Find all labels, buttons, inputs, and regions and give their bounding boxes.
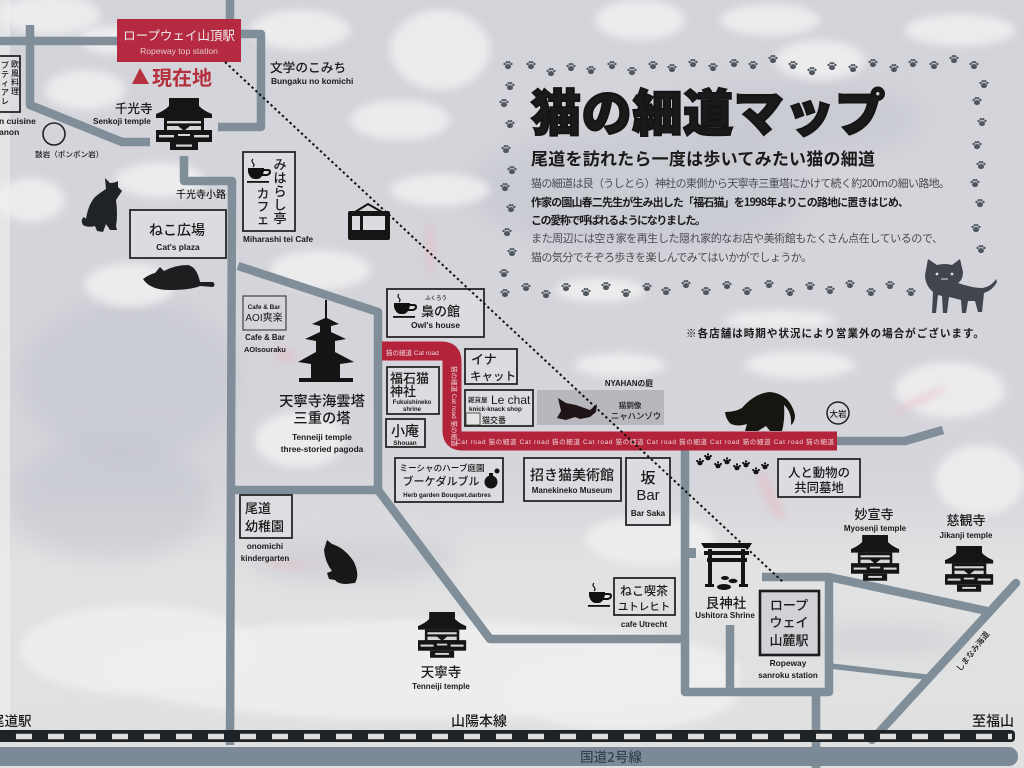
- left cut-off restaurant box: レ: [1, 96, 9, 107]
- Onomichi kindergarten: onomichi: [247, 542, 283, 551]
- Fukuishineko shrine: 神社: [390, 381, 416, 400]
- AOI Cafe and Bar: AOIsouraku: [244, 345, 286, 354]
- Owl's house: [387, 289, 484, 337]
- Tenneiji Kaiunto label: 天寧寺海雲塔: [279, 390, 366, 411]
- description text block: 猫の気分でそぞろ歩きを楽しんでみてはいかがでしょうか。: [531, 249, 812, 265]
- national route 2 band: [0, 746, 1018, 766]
- Bar Saka: Bar Saka: [631, 509, 666, 518]
- label: Bungaku no komichi: Bungaku no komichi: [271, 76, 353, 86]
- Herb garden Bouquet: Herb garden Bouquet.darbres: [403, 492, 491, 499]
- cat road: red path: 猫の細道 Cat road 猫の細道: [450, 366, 459, 447]
- Fukuishineko shrine: shrine: [403, 407, 422, 413]
- rail labels: [0, 710, 1014, 731]
- ropeway dotted line: [225, 62, 783, 582]
- Nyahan garden: NYAHANの庭: [605, 378, 653, 388]
- Owl's house: ふくろう: [425, 294, 447, 302]
- AOI Cafe and Bar: AOI爽楽: [245, 311, 283, 324]
- current location marker: 現在地: [152, 62, 212, 91]
- icon: big black cat: [725, 392, 795, 431]
- Jikanji temple: [940, 510, 993, 592]
- Ropeway sanroku station: ロープ: [770, 595, 808, 614]
- icon: grey cartoon cat: [925, 259, 997, 313]
- left cut-off restaurant box: テ: [1, 69, 9, 80]
- Le chat knick-knack shop: Le chat: [491, 393, 531, 407]
- black paw trail: [696, 453, 769, 474]
- Jikanji temple: Jikanji temple: [940, 531, 993, 540]
- Bar Saka: 坂: [640, 467, 656, 488]
- Ropeway sanroku station: sanroku station: [758, 671, 818, 680]
- ropeway top station label: Ropeway top station: [140, 46, 218, 56]
- Ina cat: [465, 349, 517, 384]
- Tenneiji Kaiunto label: three-storied pagoda: [281, 444, 364, 454]
- icon: sitting cat: [82, 178, 122, 232]
- Jikanji temple: 慈観寺: [946, 510, 986, 529]
- Bonbon rock: [35, 123, 103, 160]
- Oiwa rock: [827, 402, 849, 424]
- Manekineko Museum: Manekineko Museum: [532, 486, 612, 495]
- left cut-off restaurant box: 風: [11, 68, 19, 79]
- Le chat knick-knack shop: knick-knack shop: [469, 406, 522, 413]
- Ina cat: キャット: [470, 368, 516, 384]
- icon: cable car: [348, 204, 390, 240]
- cafe Utrecht: [588, 578, 675, 629]
- left cut-off restaurant box: ブ: [1, 60, 9, 71]
- left cut-off restaurant box: 理: [11, 86, 19, 97]
- Senkoji temple: [93, 98, 212, 150]
- Oiwa rock: 大岩: [829, 408, 847, 420]
- Miharashi-tei cafe: し: [273, 194, 287, 214]
- Miharashi-tei cafe: み: [273, 154, 287, 173]
- Herb garden Bouquet: ミーシャのハーブ庭園: [399, 462, 485, 474]
- railway line: [0, 730, 1015, 742]
- Ina cat: イナ: [471, 349, 497, 368]
- Tenneiji Kaiunto label: Tenneiji temple: [292, 432, 352, 442]
- Miharashi-tei cafe: カ: [257, 183, 269, 202]
- Fukuishineko shrine: 福石猫: [390, 368, 429, 387]
- AOI Cafe and Bar: Cafe & Bar: [248, 304, 281, 311]
- ropeway top station label: ロープウェイ山頂駅: [123, 25, 235, 44]
- Onomichi kindergarten: kindergarten: [241, 554, 289, 563]
- Fukuishineko shrine: Fukuishineko: [393, 400, 432, 406]
- description text block: この愛称で呼ばれるようになりました。: [531, 212, 706, 228]
- Owl's house: 梟の館: [421, 301, 460, 320]
- Myosenji temple: [844, 504, 907, 581]
- Miharashi-tei cafe: [243, 152, 314, 244]
- Le chat knick-knack shop: 雑貨屋: [468, 394, 488, 404]
- Shouan: [386, 419, 425, 447]
- Nyahan garden: 猫銅像: [619, 400, 642, 411]
- Nyahan garden: ニャハンゾウ: [611, 410, 661, 422]
- Ushitora shrine: Ushitora Shrine: [695, 611, 755, 620]
- Tenneiji Kaiunto label: 三重の塔: [293, 407, 351, 428]
- Shouan: Shouan: [393, 440, 417, 447]
- Manekineko Museum: [524, 458, 621, 501]
- description text block: 猫の細道は艮（うしとら）神社の東側から天寧寺三重塔にかけて続く約200mの細い路地。: [531, 175, 950, 191]
- AOI Cafe and Bar: [243, 296, 286, 354]
- subtitle: 尾道を訪れたら一度は歩いてみたい猫の細道: [531, 145, 875, 170]
- Miharashi-tei cafe: 亭: [273, 208, 287, 227]
- left cut-off restaurant box: ア: [1, 87, 9, 98]
- Bar Saka: Bar: [636, 487, 660, 504]
- Miharashi-tei cafe: ら: [273, 181, 287, 200]
- icon: lying cat: [143, 265, 214, 290]
- Ropeway sanroku station: [758, 591, 819, 680]
- Myosenji temple: Myosenji temple: [844, 524, 907, 533]
- Tenneiji temple: 天寧寺: [421, 661, 461, 681]
- Onomichi kindergarten: 幼稚園: [245, 516, 284, 535]
- Miharashi-tei cafe: フ: [257, 196, 269, 215]
- rail labels: 山陽本線: [451, 711, 507, 731]
- cat road: red path: 猫の細道 Cat road: [386, 348, 439, 357]
- description text block: 作家の園山春二先生が生み出した「福石猫」を1998年よりこの路地に置きはじめ、: [531, 194, 909, 210]
- Herb garden Bouquet: [395, 458, 503, 502]
- title: 猫の細道マップ: [531, 74, 885, 146]
- cafe Utrecht: ねこ喫茶: [620, 582, 668, 599]
- Ropeway sanroku station: ウェイ: [769, 612, 809, 631]
- Fukuishineko shrine: [387, 367, 439, 414]
- pagoda icon: [298, 300, 354, 382]
- road label: rotated road name: しまなみ海道: [954, 629, 992, 674]
- joint grave for people and animals: 人と動物の: [788, 463, 850, 481]
- Tenneiji temple: [412, 612, 470, 691]
- left cut-off restaurant box: 料: [11, 77, 19, 88]
- joint grave for people and animals: [778, 459, 860, 497]
- Onomichi kindergarten: 尾道: [245, 498, 271, 517]
- panel: paw print border: [499, 55, 989, 298]
- Ushitora shrine: 艮神社: [706, 592, 747, 612]
- Bonbon rock: 鼓岩（ポンポン岩）: [35, 149, 103, 160]
- Herb garden Bouquet: ブーケダルブル: [402, 473, 480, 489]
- national route 2 band: 国道2号線: [580, 746, 642, 766]
- Nyahan garden: [537, 378, 664, 425]
- Manekineko Museum: 招き猫美術館: [530, 465, 614, 485]
- description text block: [531, 175, 950, 265]
- joint grave for people and animals: 共同墓地: [794, 478, 844, 496]
- icon: cat from behind: [324, 540, 357, 584]
- Shouan: 小庵: [391, 421, 419, 441]
- Ropeway sanroku station: 山麓駅: [769, 630, 809, 649]
- cat road: red path: [382, 348, 837, 447]
- description text block: また周辺には空き家を再生した隠れ家的なお店や美術館もたくさん点在しているので、: [531, 230, 943, 246]
- label: Senkoji alley: 千光寺小路: [176, 186, 226, 201]
- Onomichi kindergarten: [240, 495, 292, 563]
- AOI Cafe and Bar: Cafe & Bar: [245, 333, 285, 342]
- Senkoji temple: 千光寺: [115, 98, 153, 117]
- Miharashi-tei cafe: Miharashi tei Cafe: [243, 235, 314, 244]
- Cat's plaza box: Cat's plaza: [156, 242, 200, 252]
- Le chat knick-knack shop: [465, 390, 533, 426]
- cafe Utrecht: cafe Utrecht: [621, 620, 667, 629]
- label: Bungaku no komichi: [270, 57, 353, 86]
- Miharashi-tei cafe: ェ: [257, 209, 269, 228]
- Ropeway sanroku station: Ropeway: [770, 658, 807, 668]
- label: Bungaku no komichi: 文学のこみち: [270, 57, 346, 76]
- Tenneiji Kaiunto label: [279, 390, 366, 454]
- Senkoji temple: Senkoji temple: [93, 117, 151, 126]
- Miharashi-tei cafe: は: [273, 168, 287, 186]
- Bar Saka: [626, 458, 670, 525]
- ropeway top station label: [117, 19, 241, 62]
- Ushitora shrine: [695, 543, 755, 620]
- left cut-off restaurant box: n cuisine: [0, 116, 36, 126]
- left cut-off restaurant box: ィ: [1, 78, 9, 89]
- cafe Utrecht: ユトレヒト: [618, 599, 670, 614]
- Cat's plaza box: ねこ広場: [149, 220, 205, 240]
- left cut-off restaurant box: 欧: [11, 59, 19, 70]
- Myosenji temple: 妙宣寺: [854, 504, 894, 523]
- notice: ※各店舗は時期や状況により営業外の場合がございます。: [686, 326, 984, 341]
- cat road: red path: Cat road 猫の細道 Cat road 猫の細道 Cat road 猫の細道 Cat road 猫の細道 Cat road 猫の細道 Cat road 猫の細道: [456, 437, 834, 446]
- Le chat knick-knack shop: 猫交番: [482, 415, 506, 426]
- Owl's house: Owl's house: [411, 320, 460, 330]
- Cat's plaza box: [130, 210, 226, 258]
- Tenneiji temple: Tenneiji temple: [412, 682, 470, 691]
- rail labels: 至福山: [972, 711, 1014, 731]
- left cut-off restaurant box: [0, 56, 36, 137]
